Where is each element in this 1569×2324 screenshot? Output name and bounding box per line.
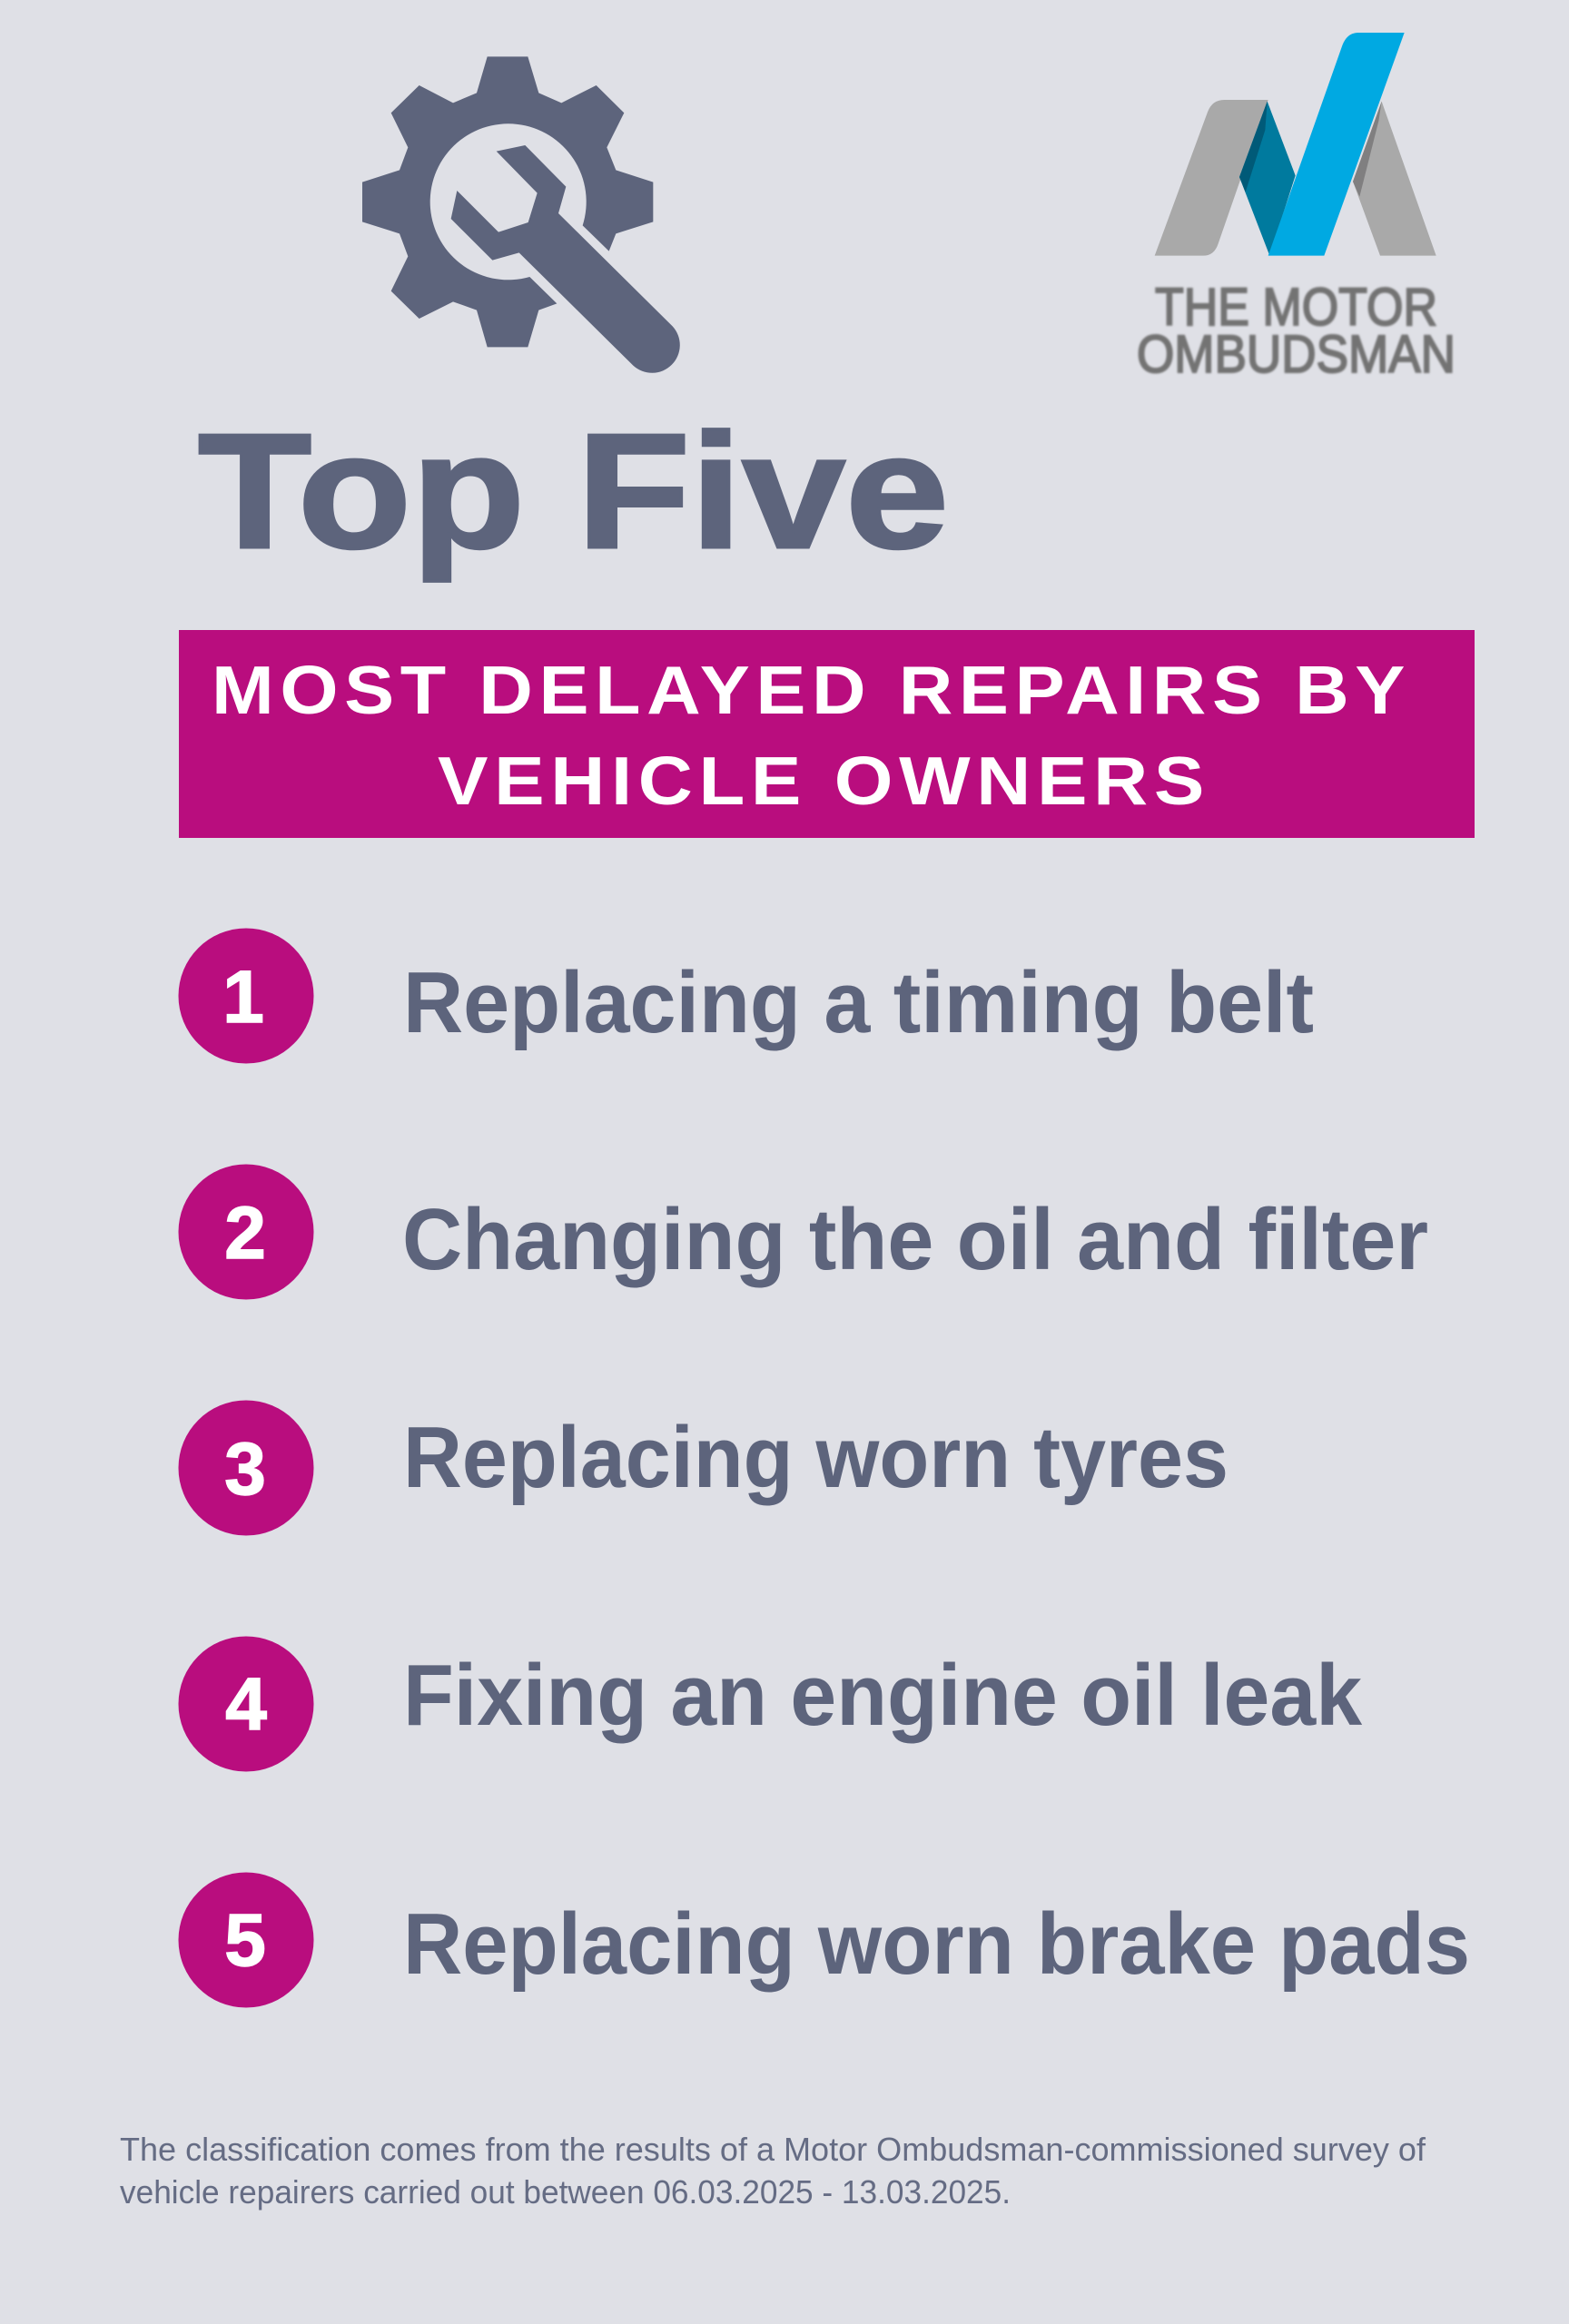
list item 3 xyxy=(178,1400,1229,1536)
icon: gear and wrench xyxy=(362,56,680,373)
list item 3: Replacing worn tyres xyxy=(403,1409,1229,1506)
logo: The Motor Ombudsman xyxy=(1137,33,1456,384)
list item 5: Replacing worn brake pads xyxy=(403,1896,1470,1993)
footnote: vehicle repairers carried out between 06.03.2025 - 13.03.2025. xyxy=(120,2173,1011,2211)
banner text xyxy=(212,652,1411,819)
footnote: The classification comes from the results of a Motor Ombudsman-commissioned survey of xyxy=(120,2131,1426,2168)
logo wordmark: OMBUDSMAN xyxy=(1137,325,1456,384)
banner text: MOST DELAYED REPAIRS BY xyxy=(212,652,1411,728)
list item 1: 1 xyxy=(222,956,264,1039)
list item 5 xyxy=(178,1872,1470,2008)
list item 2 xyxy=(178,1164,1428,1300)
list item 3: 3 xyxy=(224,1428,266,1511)
footnote xyxy=(120,2131,1426,2211)
logo mark xyxy=(1155,33,1436,256)
logo wordmark: THE MOTOR xyxy=(1155,278,1437,337)
logo wordmark xyxy=(1137,278,1456,384)
list item 2: 2 xyxy=(224,1192,266,1275)
list item 5: 5 xyxy=(224,1899,266,1982)
list item 4: Fixing an engine oil leak xyxy=(403,1647,1363,1744)
list item 2: Changing the oil and filter xyxy=(402,1191,1428,1288)
banner text: VEHICLE OWNERS xyxy=(438,743,1210,819)
list item 4: 4 xyxy=(225,1663,267,1746)
title: Top Five xyxy=(198,400,949,583)
list item 4 xyxy=(178,1636,1363,1772)
banner: subtitle xyxy=(179,630,1475,838)
list item 1: Replacing a timing belt xyxy=(403,954,1314,1051)
list item 1 xyxy=(178,928,1314,1064)
